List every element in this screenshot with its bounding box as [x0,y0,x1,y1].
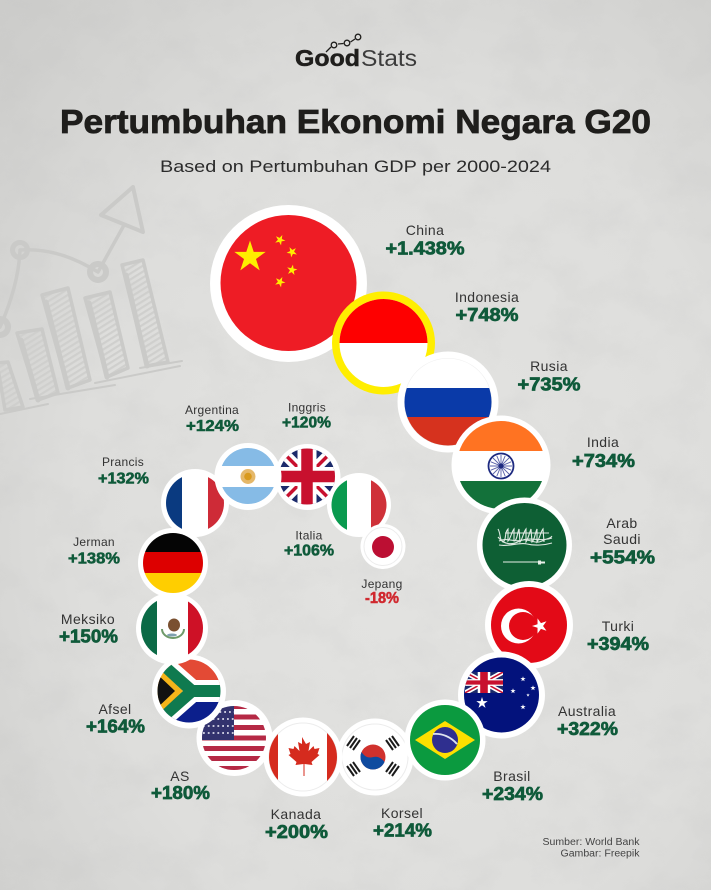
label: Indonesia [455,289,519,325]
flag: Prancis [161,469,229,537]
flag: Italia [327,473,391,537]
label: Brasil: +234% [482,784,543,804]
label: Brasil: Brasil [493,768,531,784]
label: Meksiko [59,611,118,646]
flag: Afsel [150,654,226,728]
label: Afsel [86,701,145,736]
label: Arab Saudi: Arab [606,515,638,531]
flag: Meksiko [136,592,208,664]
flag: China [210,205,367,362]
label: Korsel [373,805,432,840]
label: Afsel: Afsel [98,701,132,717]
label: Arab Saudi [590,515,655,568]
label: Arab Saudi: Saudi [603,531,641,547]
label: Australia: Australia [558,703,616,719]
label: Prancis: +132% [98,470,149,488]
label: Kanada [265,806,328,842]
background illustration: sketched rising bar chart [0,187,182,414]
label: AS [151,768,210,803]
flag: Inggris [274,444,340,510]
flag: AS [196,700,272,776]
flag: Argentina [214,443,282,510]
flag: Rusia [398,352,498,452]
label: Inggris: Inggris [288,400,326,414]
label: Kanada: Kanada [271,806,321,822]
label: Italia [284,528,334,560]
source note: Sumber: World Bank [542,837,641,848]
label: Jerman: Jerman [73,535,115,549]
label: Meksiko: Meksiko [61,611,115,627]
label: Inggris: +120% [282,414,331,432]
label: Australia: +322% [557,719,618,739]
label: Korsel: +214% [373,820,432,840]
label: Prancis [98,455,149,488]
label: Inggris [282,400,331,432]
label: Brasil [482,768,543,804]
label: Korsel: Korsel [381,805,423,821]
label: India: +734% [572,451,635,471]
label: China: China [406,222,444,238]
title: Pertumbuhan Ekonomi Negara G20 [60,103,651,140]
label: Indonesia: Indonesia [455,289,519,305]
label: Meksiko: +150% [59,626,118,646]
flag: Arab Saudi [477,498,572,592]
flag: Korsel [336,718,414,796]
flag: Turki [485,581,573,669]
label: Turki: +394% [587,634,649,654]
source note: Gambar: Freepik [560,848,641,860]
label: Rusia: Rusia [530,358,568,374]
flag: Jerman [138,528,208,598]
label: China: +1.438% [386,238,464,258]
label: Jepang: -18% [365,590,399,607]
flag: Jepang [360,524,406,569]
logo: GoodStats [295,34,417,71]
label: Italia: +106% [284,542,334,560]
logo icon: rising line with nodes [326,34,361,52]
flag: Australia [458,652,545,738]
label: AS: AS [170,768,190,784]
label: China [386,222,464,258]
label: Italia: Italia [295,528,323,542]
label: Arab Saudi: +554% [590,548,655,568]
label: Rusia [518,358,580,394]
label: Australia [557,703,618,739]
subtitle: Based on Pertumbuhan GDP per 2000-2024 [160,157,551,176]
label: Jerman [68,535,120,568]
flag: India [452,416,550,514]
source note [542,837,641,860]
label: Prancis: Prancis [102,455,144,469]
label: Argentina: Argentina [185,403,239,417]
label: Rusia: +735% [518,374,580,394]
flag: Kanada [264,718,342,796]
label: Jerman: +138% [68,550,120,568]
label: Indonesia: +748% [456,305,518,325]
label: Afsel: +164% [86,716,145,736]
label: Turki [587,618,649,654]
label: AS: +180% [151,783,210,803]
label: Argentina [185,403,239,435]
label: India [572,434,635,471]
label: Jepang [361,577,403,607]
label: India: India [587,434,619,450]
flag: Brasil [404,700,486,780]
logo wordmark: Stats [361,45,417,71]
label: Kanada: +200% [265,822,328,842]
logo wordmark: Good [295,45,360,71]
flag: Indonesia [332,292,435,394]
label: Turki: Turki [602,618,634,634]
label: Argentina: +124% [186,418,239,435]
label: Jepang: Jepang [361,577,403,591]
